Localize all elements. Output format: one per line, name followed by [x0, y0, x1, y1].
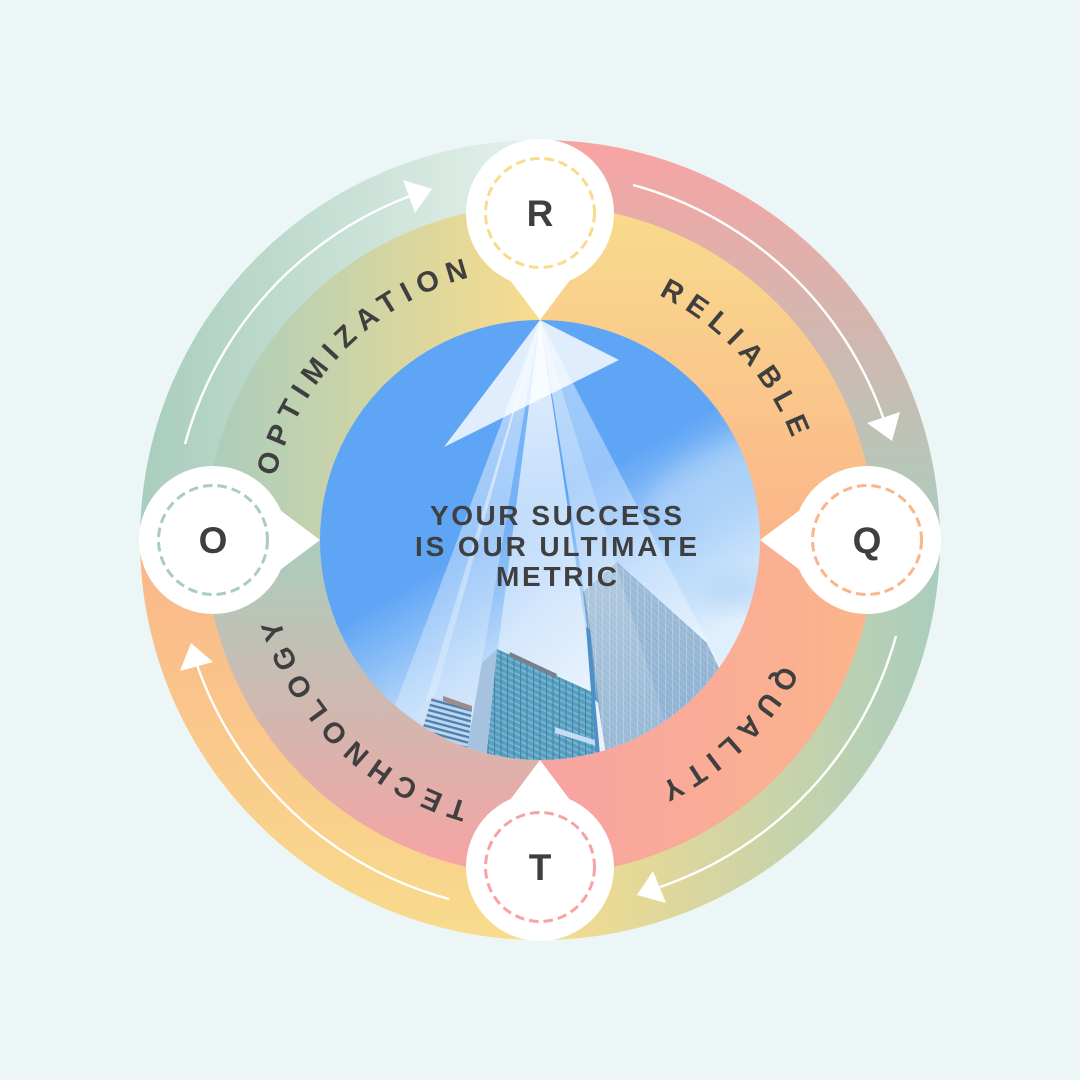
- inner ring with four gradient quadrants: [205, 205, 875, 875]
- light beams behind the low buildings: [395, 320, 591, 730]
- pin: Q: Q: [853, 520, 881, 561]
- outer ring with four gradient quadrants: [140, 140, 940, 940]
- curved label: quality: QUALITY: [666, 668, 796, 802]
- arrow: optimization to reliable: [185, 180, 432, 444]
- pin: Q: [760, 466, 941, 614]
- central headline: YOUR SUCCESS: [430, 500, 682, 531]
- arrow: reliable to quality: [633, 185, 900, 441]
- central headline: METRIC: [496, 561, 617, 592]
- pin: T: [466, 760, 614, 941]
- arrow: technology to optimization: [180, 643, 449, 899]
- central photo: skyscrapers and sky with light beams: [320, 320, 760, 760]
- building: small left block: [420, 696, 472, 748]
- curved label: optimization: OPTIMIZATION: [258, 258, 468, 474]
- light beams over the tower: [540, 322, 719, 752]
- pin: O: [139, 466, 320, 614]
- pin: T: T: [529, 847, 552, 888]
- curved label: technology: TECHNOLOGY: [260, 626, 464, 822]
- building: middle teal block: [467, 649, 598, 760]
- arrow head shape: [444, 320, 619, 447]
- arrow: quality to technology: [637, 636, 896, 903]
- central headline: [415, 500, 697, 592]
- pin: O: O: [199, 520, 227, 561]
- building: tall right tower: [583, 562, 719, 753]
- pin: R: [466, 139, 614, 320]
- pin: R: R: [527, 193, 553, 234]
- curved label: reliable: RELIABLE: [660, 278, 810, 437]
- central headline: IS OUR ULTIMATE: [415, 531, 697, 562]
